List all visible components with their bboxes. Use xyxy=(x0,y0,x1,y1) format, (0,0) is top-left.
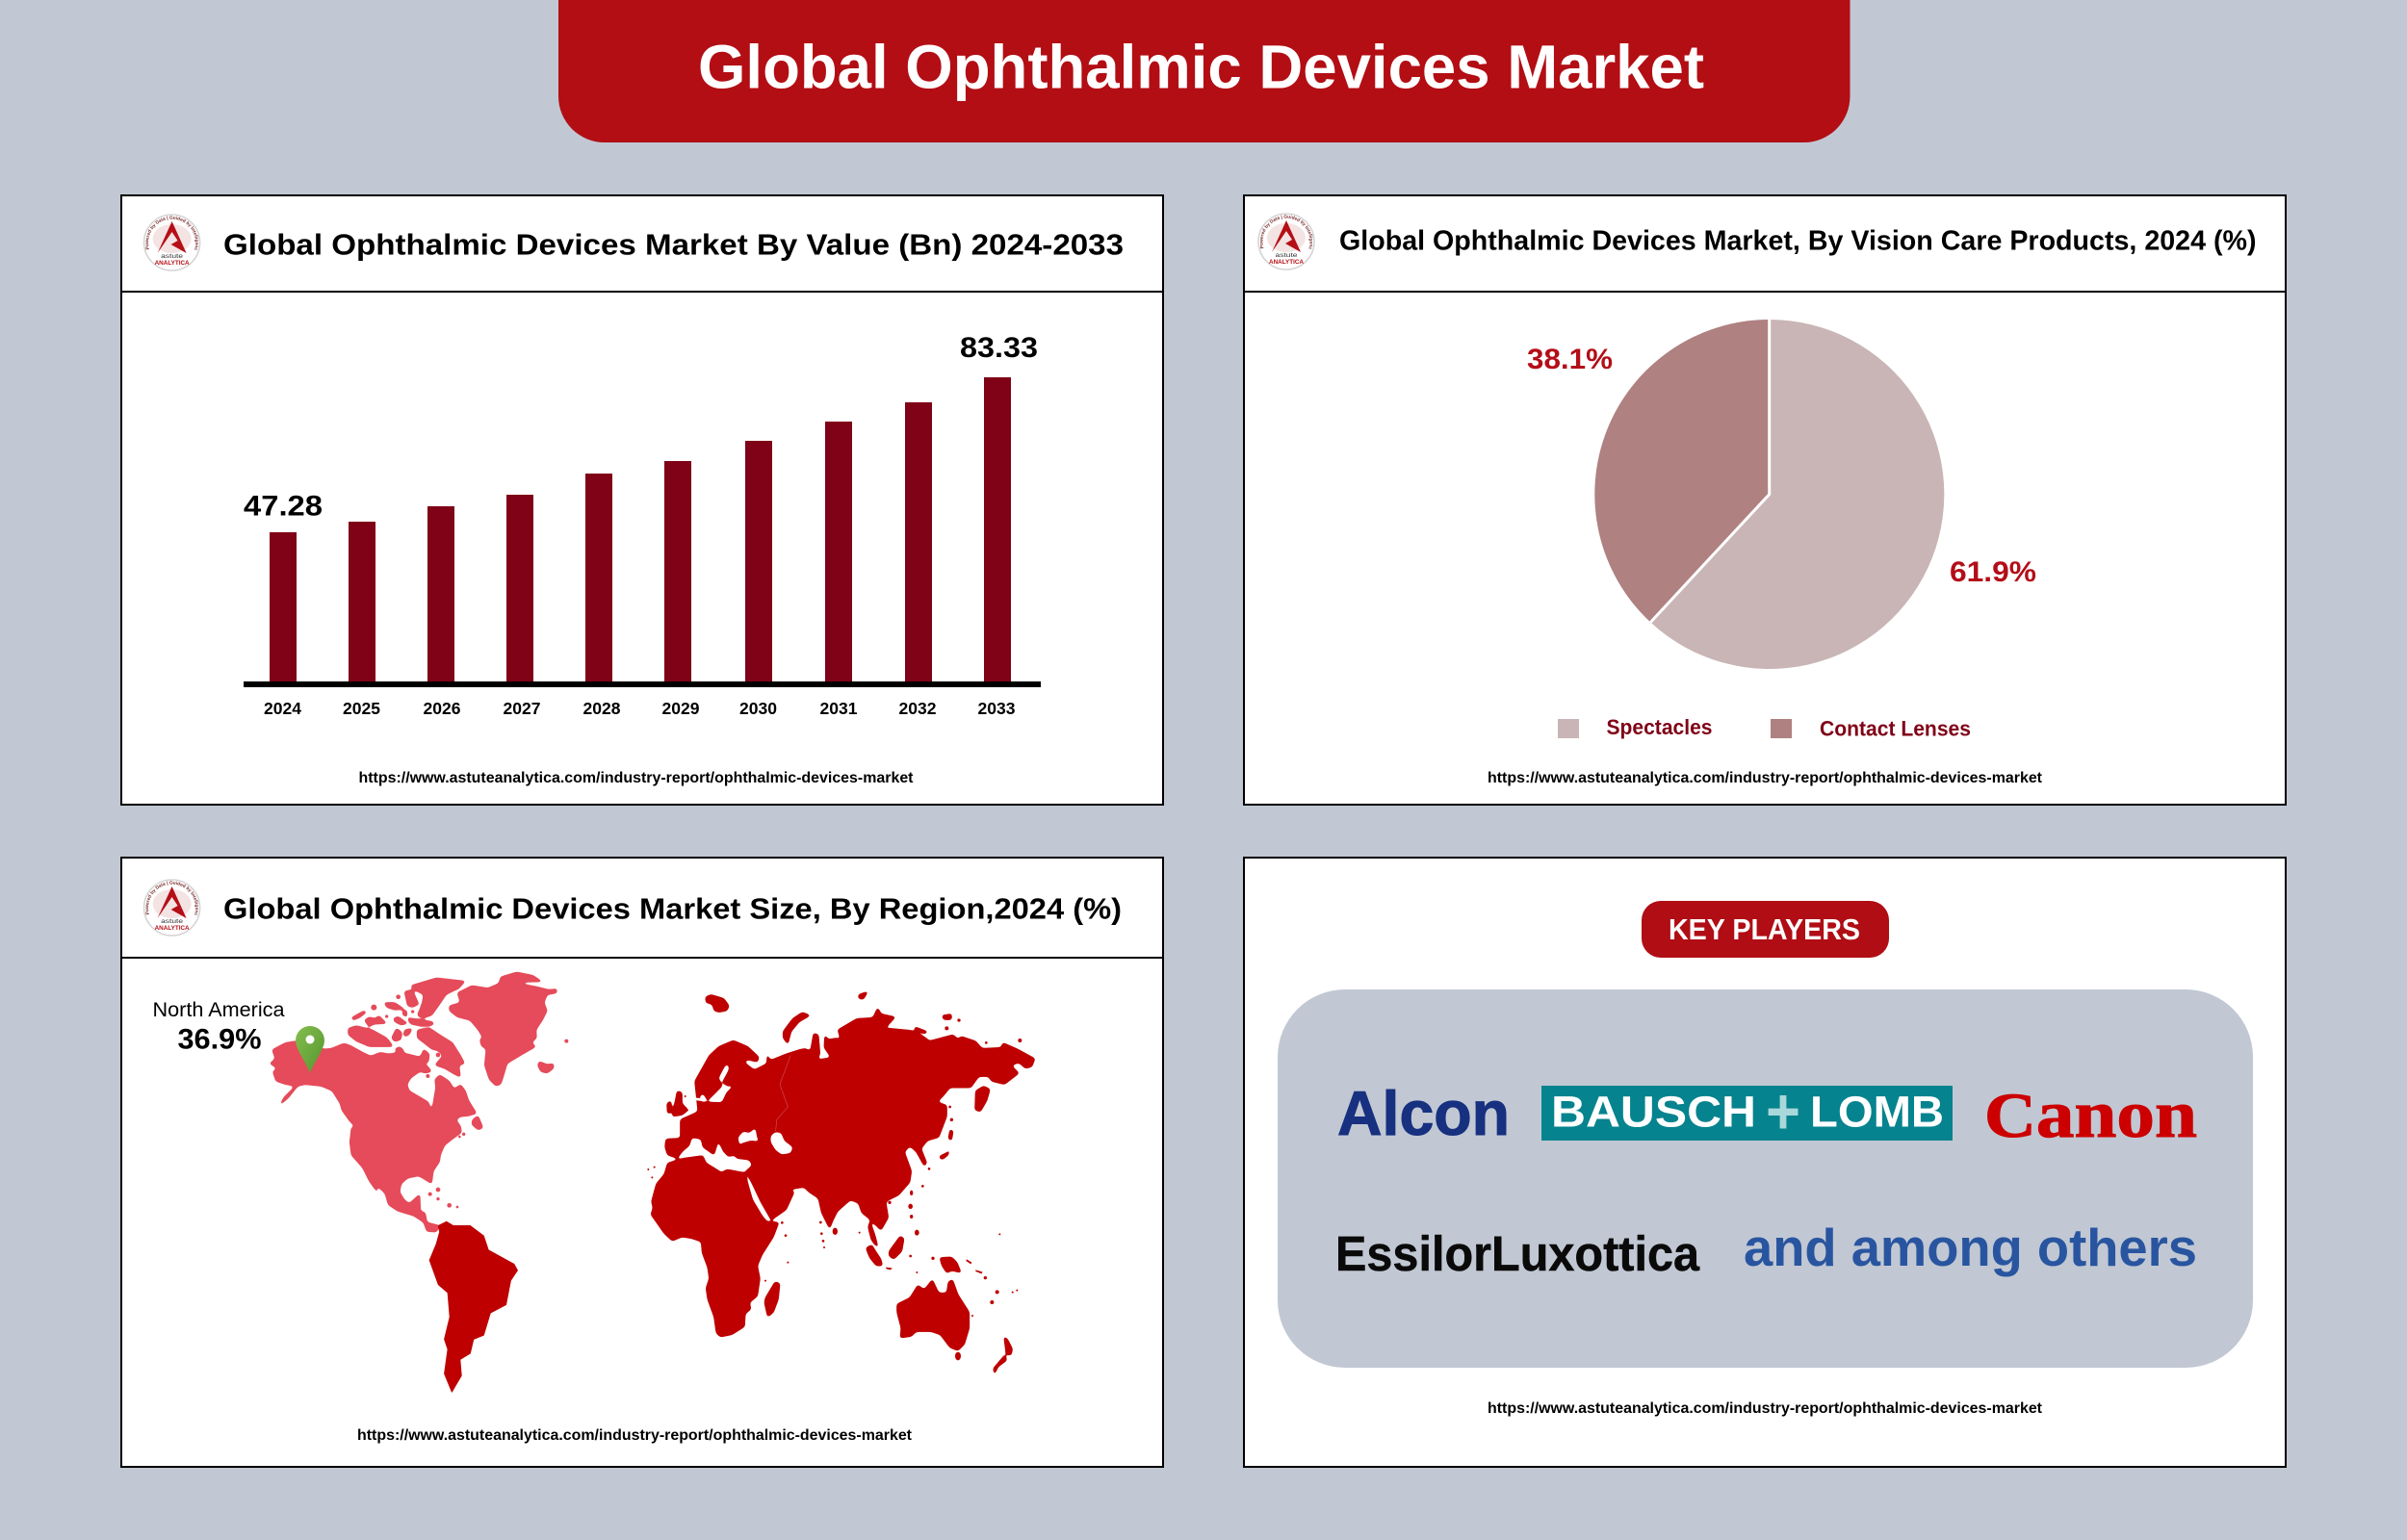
map: north america xyxy=(270,972,568,1232)
bar chart: 2024 xyxy=(264,699,301,718)
key players badge: KEY PLAYERS xyxy=(1669,912,1860,946)
title banner xyxy=(558,0,1851,142)
source url: https://www.astuteanalytica.com/industry-report/ophthalmic-devices-market xyxy=(1488,770,2042,786)
callout: north america share: 36.9% xyxy=(177,1024,262,1055)
key players badge xyxy=(1642,901,1889,958)
panel heading: Global Ophthalmic Devices Market By Value (Bn) 2024-2033 xyxy=(223,227,1124,262)
icon: astute analytica logo xyxy=(142,879,200,937)
callout: north america share xyxy=(152,999,285,1055)
icon: astute analytica logo xyxy=(142,214,200,271)
logo: canon: Canon xyxy=(1984,1078,2197,1152)
panel: key players xyxy=(1244,858,2286,1467)
panel heading: Global Ophthalmic Devices Market, By Vision Care Products, 2024 (%) xyxy=(1339,225,2257,256)
bar chart: 2026 xyxy=(424,699,461,718)
and among others: and among others xyxy=(1744,1218,2197,1277)
source url: https://www.astuteanalytica.com/industry-report/ophthalmic-devices-market xyxy=(358,770,913,786)
logo: alcon: Alcon xyxy=(1337,1078,1510,1148)
bar chart: 2028 xyxy=(583,699,621,718)
pie chart: 61.9% xyxy=(1950,556,2036,588)
panel: market by value xyxy=(120,194,1164,806)
icon: astute analytica logo: ANALYTICA xyxy=(1269,259,1304,266)
icon: astute analytica logo: ANALYTICA xyxy=(155,925,190,932)
icon: location pin xyxy=(296,1026,324,1073)
bar chart: 2027 xyxy=(504,699,540,718)
bar chart xyxy=(244,332,1041,718)
icon: astute analytica logo: Powered by Data | Guided by Intelligence xyxy=(1259,215,1313,249)
pie chart xyxy=(1527,320,2036,669)
logo: bausch + lomb xyxy=(1541,1075,1953,1148)
bar chart: 2030 xyxy=(739,699,777,718)
logo: bausch + lomb: LOMB xyxy=(1810,1088,1944,1136)
bar chart: 2025 xyxy=(343,699,380,718)
icon: astute analytica logo: astute xyxy=(1275,253,1298,259)
bar chart: 2033 xyxy=(978,699,1016,718)
map: europe, asia, africa, oceania xyxy=(647,991,1035,1374)
bar chart: 2031 xyxy=(820,699,858,718)
legend: Contact Lenses xyxy=(1820,716,1971,741)
icon: astute analytica logo: Powered by Data | Guided by Intelligence xyxy=(145,881,198,915)
panel: market size by region xyxy=(120,857,1164,1468)
map: south america xyxy=(429,1221,517,1392)
legend: Spectacles xyxy=(1606,715,1712,739)
pie chart: 38.1% xyxy=(1527,344,1613,375)
logo: essilorluxottica: EssilorLuxottica xyxy=(1335,1226,1700,1281)
logo panel xyxy=(1278,989,2253,1368)
bar chart: 83.33 xyxy=(960,332,1038,364)
legend xyxy=(1558,715,1971,741)
bar chart: 2032 xyxy=(899,699,937,718)
icon: astute analytica logo: astute xyxy=(161,254,184,260)
panel: vision care products xyxy=(1243,194,2287,806)
icon: astute analytica logo: astute xyxy=(161,919,184,925)
bar chart: 2029 xyxy=(662,699,700,718)
panel heading: Global Ophthalmic Devices Market Size, By Region,2024 (%) xyxy=(223,891,1122,926)
logo: bausch + lomb: + xyxy=(1766,1075,1800,1148)
callout: north america share: North America xyxy=(152,999,285,1021)
bar chart: 47.28 xyxy=(244,491,323,522)
icon: astute analytica logo: Powered by Data | Guided by Intelligence xyxy=(145,216,198,250)
source url: https://www.astuteanalytica.com/industry-report/ophthalmic-devices-market xyxy=(357,1427,912,1444)
title: Global Ophthalmic Devices Market xyxy=(698,33,1704,102)
icon: astute analytica logo: ANALYTICA xyxy=(155,260,190,267)
icon: astute analytica logo xyxy=(1257,213,1315,270)
world map xyxy=(152,972,1035,1392)
logo: bausch + lomb: BAUSCH xyxy=(1551,1088,1756,1136)
source url: https://www.astuteanalytica.com/industry-report/ophthalmic-devices-market xyxy=(1488,1400,2042,1417)
